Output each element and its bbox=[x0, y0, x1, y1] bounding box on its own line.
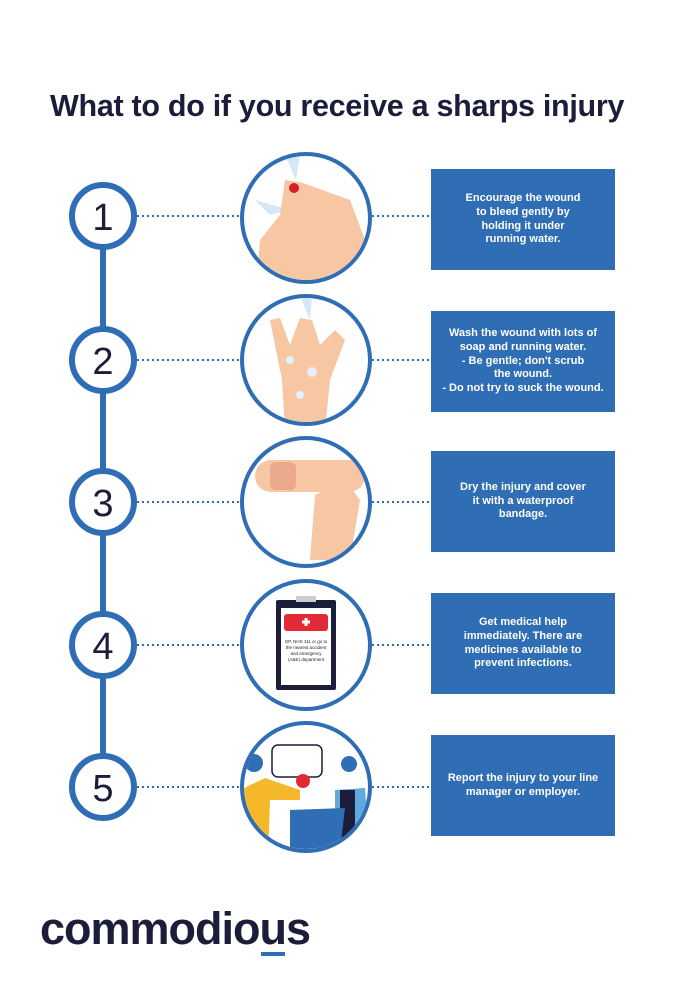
step 3 text box: it with a waterproof bbox=[473, 495, 573, 507]
step 5 text box: Report the injury to your line bbox=[448, 772, 598, 784]
icon: hand under water bbox=[242, 154, 370, 300]
number 3 bbox=[72, 471, 134, 533]
step 4 text box bbox=[431, 593, 615, 694]
number 4 bbox=[72, 614, 134, 676]
number 1 bbox=[72, 185, 134, 247]
step 3 text box: bandage. bbox=[499, 508, 547, 520]
step 1 text box: running water. bbox=[485, 233, 561, 245]
step 2 text box: the wound. bbox=[494, 368, 552, 380]
step 5 text box: manager or employer. bbox=[466, 786, 580, 798]
icon: bandaged finger bbox=[242, 438, 370, 566]
title: What to do if you receive a sharps injury bbox=[50, 89, 624, 123]
icon: clipboard: GP, NHS 111 or go to bbox=[285, 639, 328, 644]
step 3 text box: Dry the injury and cover bbox=[460, 481, 586, 493]
step 1 text box: holding it under bbox=[481, 220, 565, 232]
icon: clipboard bbox=[242, 581, 370, 709]
step 4 text box: immediately. There are bbox=[464, 630, 582, 642]
icon: washing hand bbox=[242, 296, 370, 430]
number 4: 4 bbox=[92, 626, 114, 668]
number 3: 3 bbox=[92, 483, 114, 525]
step 2 text box bbox=[431, 311, 615, 412]
step 2 text box: Wash the wound with lots of bbox=[449, 327, 597, 339]
step 4 text box: Get medical help bbox=[479, 616, 567, 628]
number 5: 5 bbox=[92, 768, 114, 810]
step 2 text box: - Be gentle; don't scrub bbox=[462, 355, 584, 367]
icon: clipboard: the nearest accident bbox=[286, 645, 327, 650]
step 2 text box: - Do not try to suck the wound. bbox=[442, 382, 604, 394]
step 3 text box bbox=[431, 451, 615, 552]
icon: clipboard: and emergency bbox=[290, 651, 322, 656]
timeline diagram bbox=[69, 152, 429, 853]
number 2 bbox=[72, 329, 134, 391]
step 1 text box bbox=[431, 169, 615, 270]
icon: clipboard: (A&E) department bbox=[288, 657, 325, 662]
number 1: 1 bbox=[92, 197, 114, 239]
icon: people talking bbox=[238, 723, 370, 860]
step 2 text box: soap and running water. bbox=[460, 341, 586, 353]
step 1 text box: to bleed gently by bbox=[476, 206, 570, 218]
step 4 text box: medicines available to bbox=[465, 644, 581, 656]
logo: commodious bbox=[40, 903, 310, 954]
step 5 text box bbox=[431, 735, 615, 836]
step 4 text box: prevent infections. bbox=[474, 657, 572, 669]
number 2: 2 bbox=[92, 341, 114, 383]
number 5 bbox=[72, 756, 134, 818]
step 1 text box: Encourage the wound bbox=[466, 192, 580, 204]
